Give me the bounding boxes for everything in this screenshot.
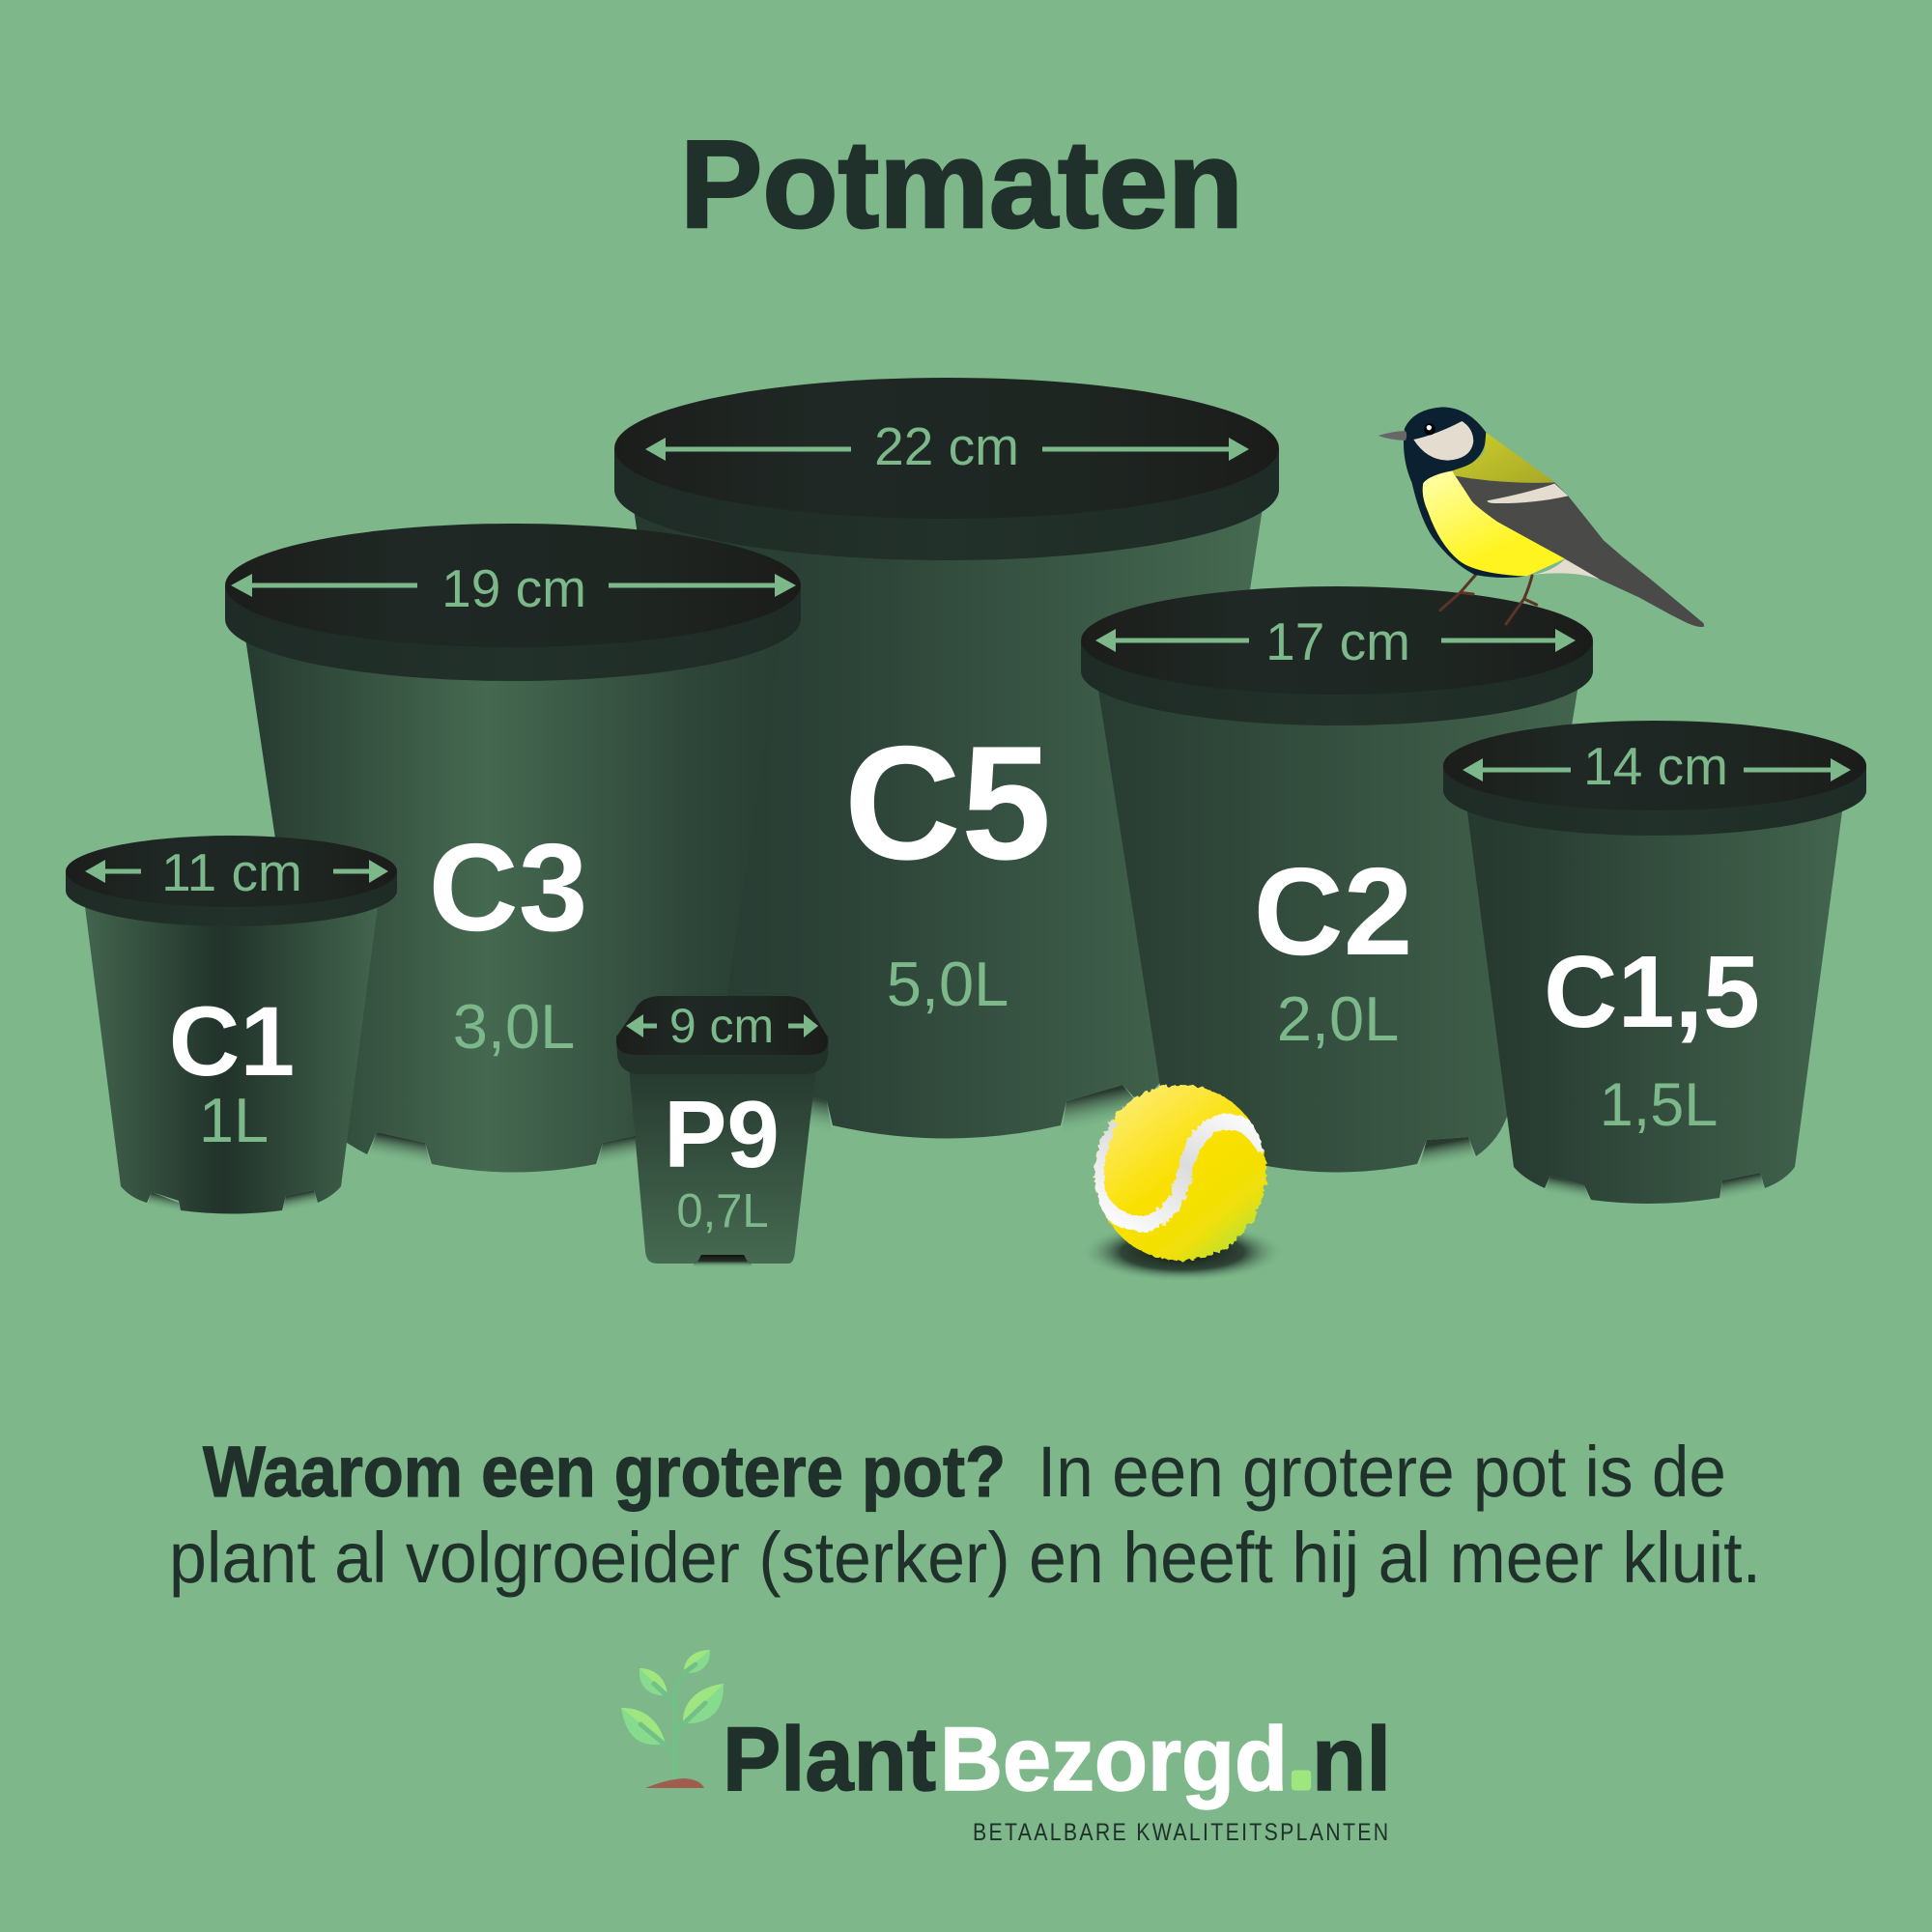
wing and tail	[1456, 476, 1704, 627]
volume C1,5: 1,5L	[1600, 1071, 1718, 1139]
rim side C1,5	[1443, 765, 1866, 836]
pot name C3: C3	[429, 818, 587, 957]
line 2: plant al volgroeider (sterker) en heeft hij al meer kluit.	[169, 1518, 1761, 1598]
notch shadows C1	[147, 1190, 318, 1215]
beak	[1378, 431, 1406, 440]
under tail	[1533, 559, 1601, 580]
line 1 rest: In een grotere pot is de	[1037, 1432, 1726, 1512]
rim side C2	[1081, 640, 1593, 725]
back	[1452, 433, 1554, 483]
rim side C1	[66, 871, 397, 926]
pot name C5: C5	[844, 712, 1051, 894]
pot: C1,5	[1443, 721, 1866, 1205]
bird	[1378, 407, 1704, 627]
logo tagline: BETAALBARE KWALITEITSPLANTEN	[973, 1818, 1388, 1845]
width label C3: 19 cm	[441, 558, 586, 618]
rim top C1	[66, 836, 397, 907]
belly	[1423, 470, 1565, 577]
logo	[621, 1650, 1391, 1845]
pot name C2: C2	[1254, 842, 1412, 981]
rim top C1,5	[1443, 721, 1866, 810]
head and breast	[1404, 407, 1526, 578]
title: Potmaten	[680, 115, 1243, 254]
rim top C2	[1081, 586, 1593, 695]
volume P9: 0,7L	[676, 1185, 769, 1237]
width arrows C1,5	[1463, 758, 1851, 781]
width arrows C3	[231, 574, 796, 597]
logo wordmark: Bezorgd	[940, 1708, 1288, 1809]
body C1	[82, 884, 381, 1213]
body P9	[629, 1067, 816, 1264]
width label C1,5: 14 cm	[1583, 736, 1728, 796]
notch shadows C5	[759, 1085, 1140, 1140]
legs	[1440, 575, 1537, 624]
width label C5: 22 cm	[874, 416, 1019, 476]
pot: C2	[1081, 586, 1593, 1174]
rim side P9	[616, 1036, 829, 1074]
logo wordmark: .	[1289, 1705, 1314, 1806]
pot: C5	[614, 378, 1279, 1140]
body C2	[1095, 667, 1581, 1173]
eye	[1424, 423, 1435, 435]
tennis ball	[1094, 1085, 1266, 1261]
logo wordmark: nl	[1312, 1708, 1391, 1809]
pot name P9: P9	[664, 1081, 780, 1187]
notch shadows C3	[367, 1132, 661, 1171]
width arrows C2	[1095, 629, 1576, 652]
logo wordmark: Plant	[723, 1708, 936, 1809]
body C5	[630, 483, 1266, 1138]
ball shadow	[1080, 1222, 1285, 1282]
notch shadow P9	[693, 1255, 753, 1267]
logo plant	[621, 1650, 724, 1788]
width label C1: 11 cm	[161, 842, 302, 902]
logo wordmark	[723, 1705, 1391, 1809]
width arrows C5	[645, 438, 1249, 461]
width label P9: 9 cm	[669, 999, 774, 1053]
rim top C3	[225, 524, 801, 647]
cheek	[1413, 421, 1473, 461]
pot: C1	[66, 836, 397, 1215]
pot: P9	[616, 996, 829, 1267]
volume C5: 5,0L	[887, 949, 1009, 1019]
body C3	[242, 618, 783, 1173]
notch shadows C2	[1198, 1137, 1476, 1174]
volume C2: 2,0L	[1277, 983, 1399, 1054]
rim side C3	[225, 585, 801, 681]
volume C3: 3,0L	[453, 991, 575, 1062]
width arrows P9	[626, 1014, 818, 1037]
rim top P9	[616, 996, 828, 1055]
bold lead: Waarom een grotere pot?	[203, 1432, 1006, 1512]
width arrows C1	[85, 860, 388, 883]
width label C2: 17 cm	[1265, 611, 1410, 671]
wing bar	[1487, 484, 1568, 503]
pot name C1,5: C1,5	[1544, 935, 1760, 1049]
pot name C1: C1	[169, 986, 295, 1096]
rim top C5	[614, 378, 1279, 519]
tennis ball with shadow	[1092, 1084, 1273, 1279]
rim side C5	[614, 448, 1279, 560]
body C1,5	[1463, 782, 1846, 1204]
pot: C3	[225, 524, 801, 1173]
volume C1: 1L	[199, 1085, 269, 1155]
text block: why a bigger pot	[169, 1432, 1761, 1598]
notch shadows C1,5	[1545, 1173, 1765, 1205]
